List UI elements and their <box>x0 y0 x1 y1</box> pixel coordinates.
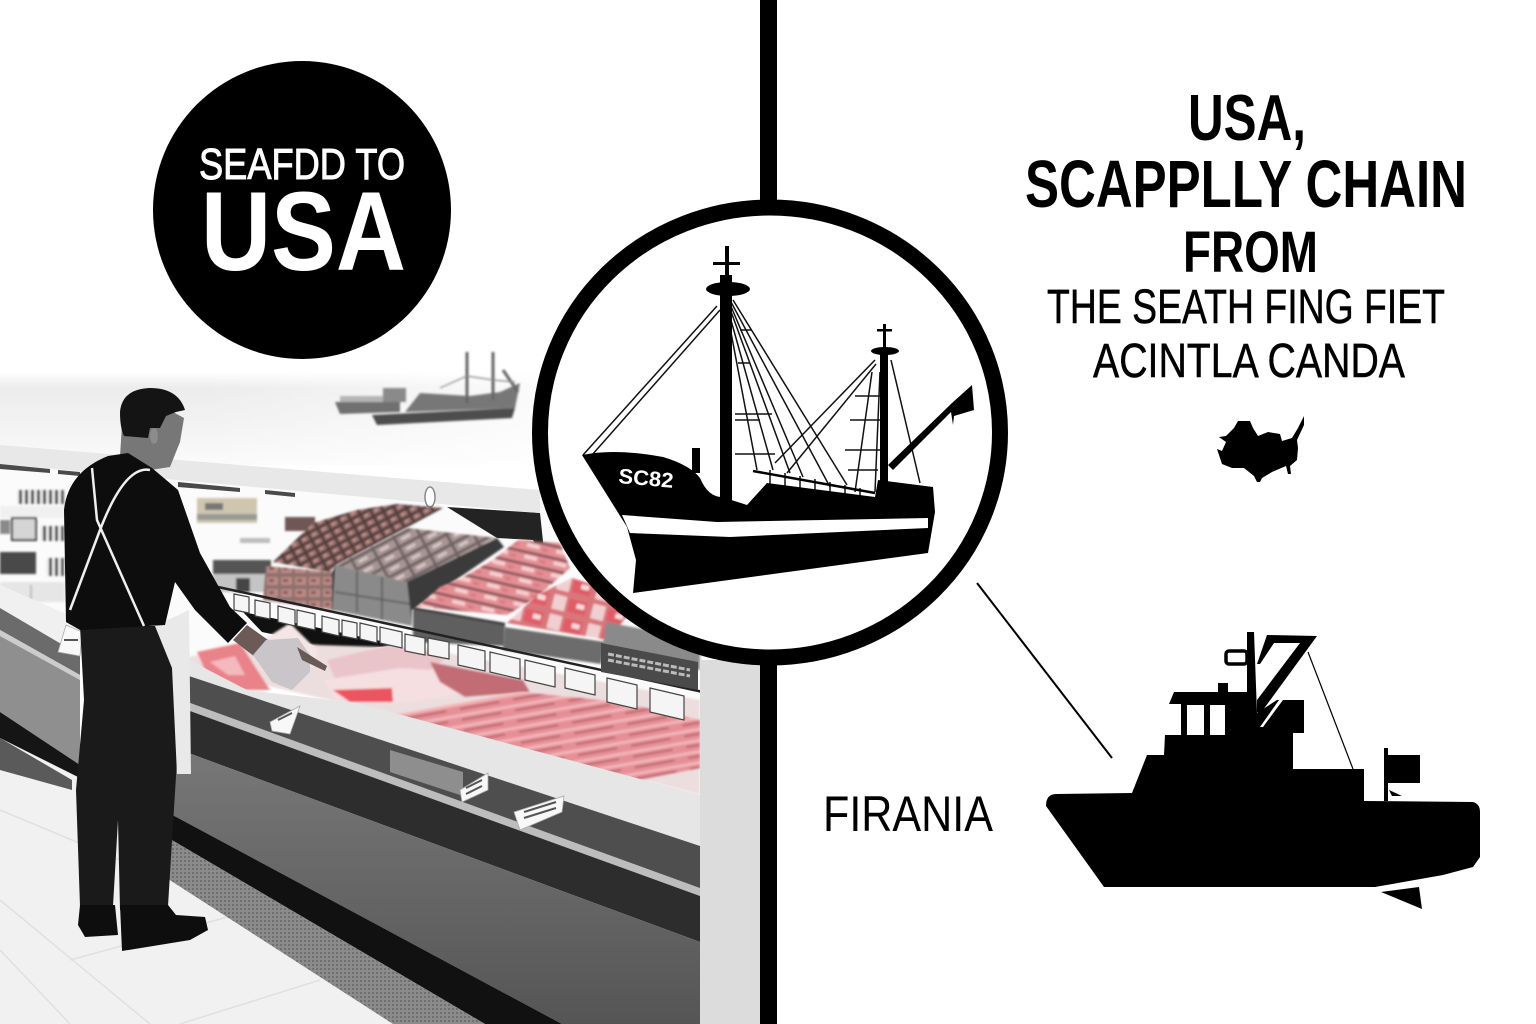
trawler bridge windows <box>1187 705 1225 735</box>
shelved packaged goods left <box>0 490 65 602</box>
shelved goods behind man <box>197 498 315 592</box>
vessel deck bar <box>753 471 875 493</box>
forearm <box>233 625 268 657</box>
worker trousers <box>76 626 177 910</box>
shelf rail with price labels <box>218 587 703 720</box>
crate: dark red fish packs <box>263 504 443 610</box>
front price cards <box>58 625 564 830</box>
heading line USA: USA, <box>1188 81 1306 154</box>
badge: seafood to USA <box>153 61 451 359</box>
sea haze backdrop <box>0 372 540 465</box>
label: Firania: FIRANIA <box>823 786 994 842</box>
worker apron panel <box>155 610 191 774</box>
vessel main mast <box>692 246 750 503</box>
thumb on knife <box>297 647 327 671</box>
floor tile lines <box>0 810 320 1024</box>
vessel rear mast and boom <box>871 324 974 482</box>
vessel hull <box>582 452 935 593</box>
worker ear <box>150 428 158 444</box>
connector line to lower vessel <box>977 583 1112 758</box>
crate: pink fish packs rear <box>413 540 570 646</box>
vertical divider bar <box>760 0 777 1024</box>
trawler stay cable <box>1308 652 1353 769</box>
haze fade to the right <box>200 372 540 465</box>
tray of pink fish fillets <box>388 692 700 788</box>
crate: grey packed fish <box>332 528 504 626</box>
trawler A-frame <box>1257 635 1317 714</box>
counter front: floor <box>0 720 420 1024</box>
dark recess under shelf <box>243 612 400 652</box>
counter front left of man <box>0 585 80 790</box>
crate: bright pink fish packs <box>503 578 700 670</box>
hull white stripe <box>622 515 928 537</box>
vessel rigging lines <box>583 300 920 497</box>
apron straps <box>70 468 150 626</box>
worker neck and face <box>120 405 184 470</box>
badge line two: USA <box>201 169 406 294</box>
hull registration: SC82 <box>618 465 674 493</box>
trawler rudder <box>1381 887 1422 909</box>
trawler flag <box>1384 748 1420 801</box>
heading: supply chain title <box>1025 81 1467 388</box>
shadow under canopy <box>447 507 545 560</box>
counter front right of man <box>165 660 700 1024</box>
trawler hull and superstructure <box>1046 632 1480 887</box>
worker in black with white apron <box>64 388 327 951</box>
central circle: fishing vessel icon <box>540 208 1000 658</box>
panel: supermarket seafood counter scene <box>0 352 760 1024</box>
icon: trawler silhouette <box>1046 632 1480 909</box>
trawler signal loop <box>1226 651 1247 664</box>
crushed ice and fish bed <box>189 623 700 795</box>
icon: USA map silhouette <box>1217 416 1304 482</box>
worker sweater <box>64 453 247 643</box>
worker hair <box>120 388 185 438</box>
badge line one: SEAFDD TO <box>199 140 405 189</box>
worker boots <box>78 905 208 951</box>
distant fishing ships <box>335 352 520 425</box>
right counter pillar <box>700 660 760 1024</box>
counter canopy band <box>0 445 540 513</box>
back shelving of display <box>0 460 703 705</box>
sliver highlight <box>1260 700 1283 727</box>
glove <box>253 638 310 690</box>
price tag hook <box>425 487 435 507</box>
canopy underside strips <box>0 464 295 497</box>
heading line from: FROM <box>1183 220 1318 285</box>
heading line acintla canda: ACINTLA CANDA <box>1093 335 1405 388</box>
